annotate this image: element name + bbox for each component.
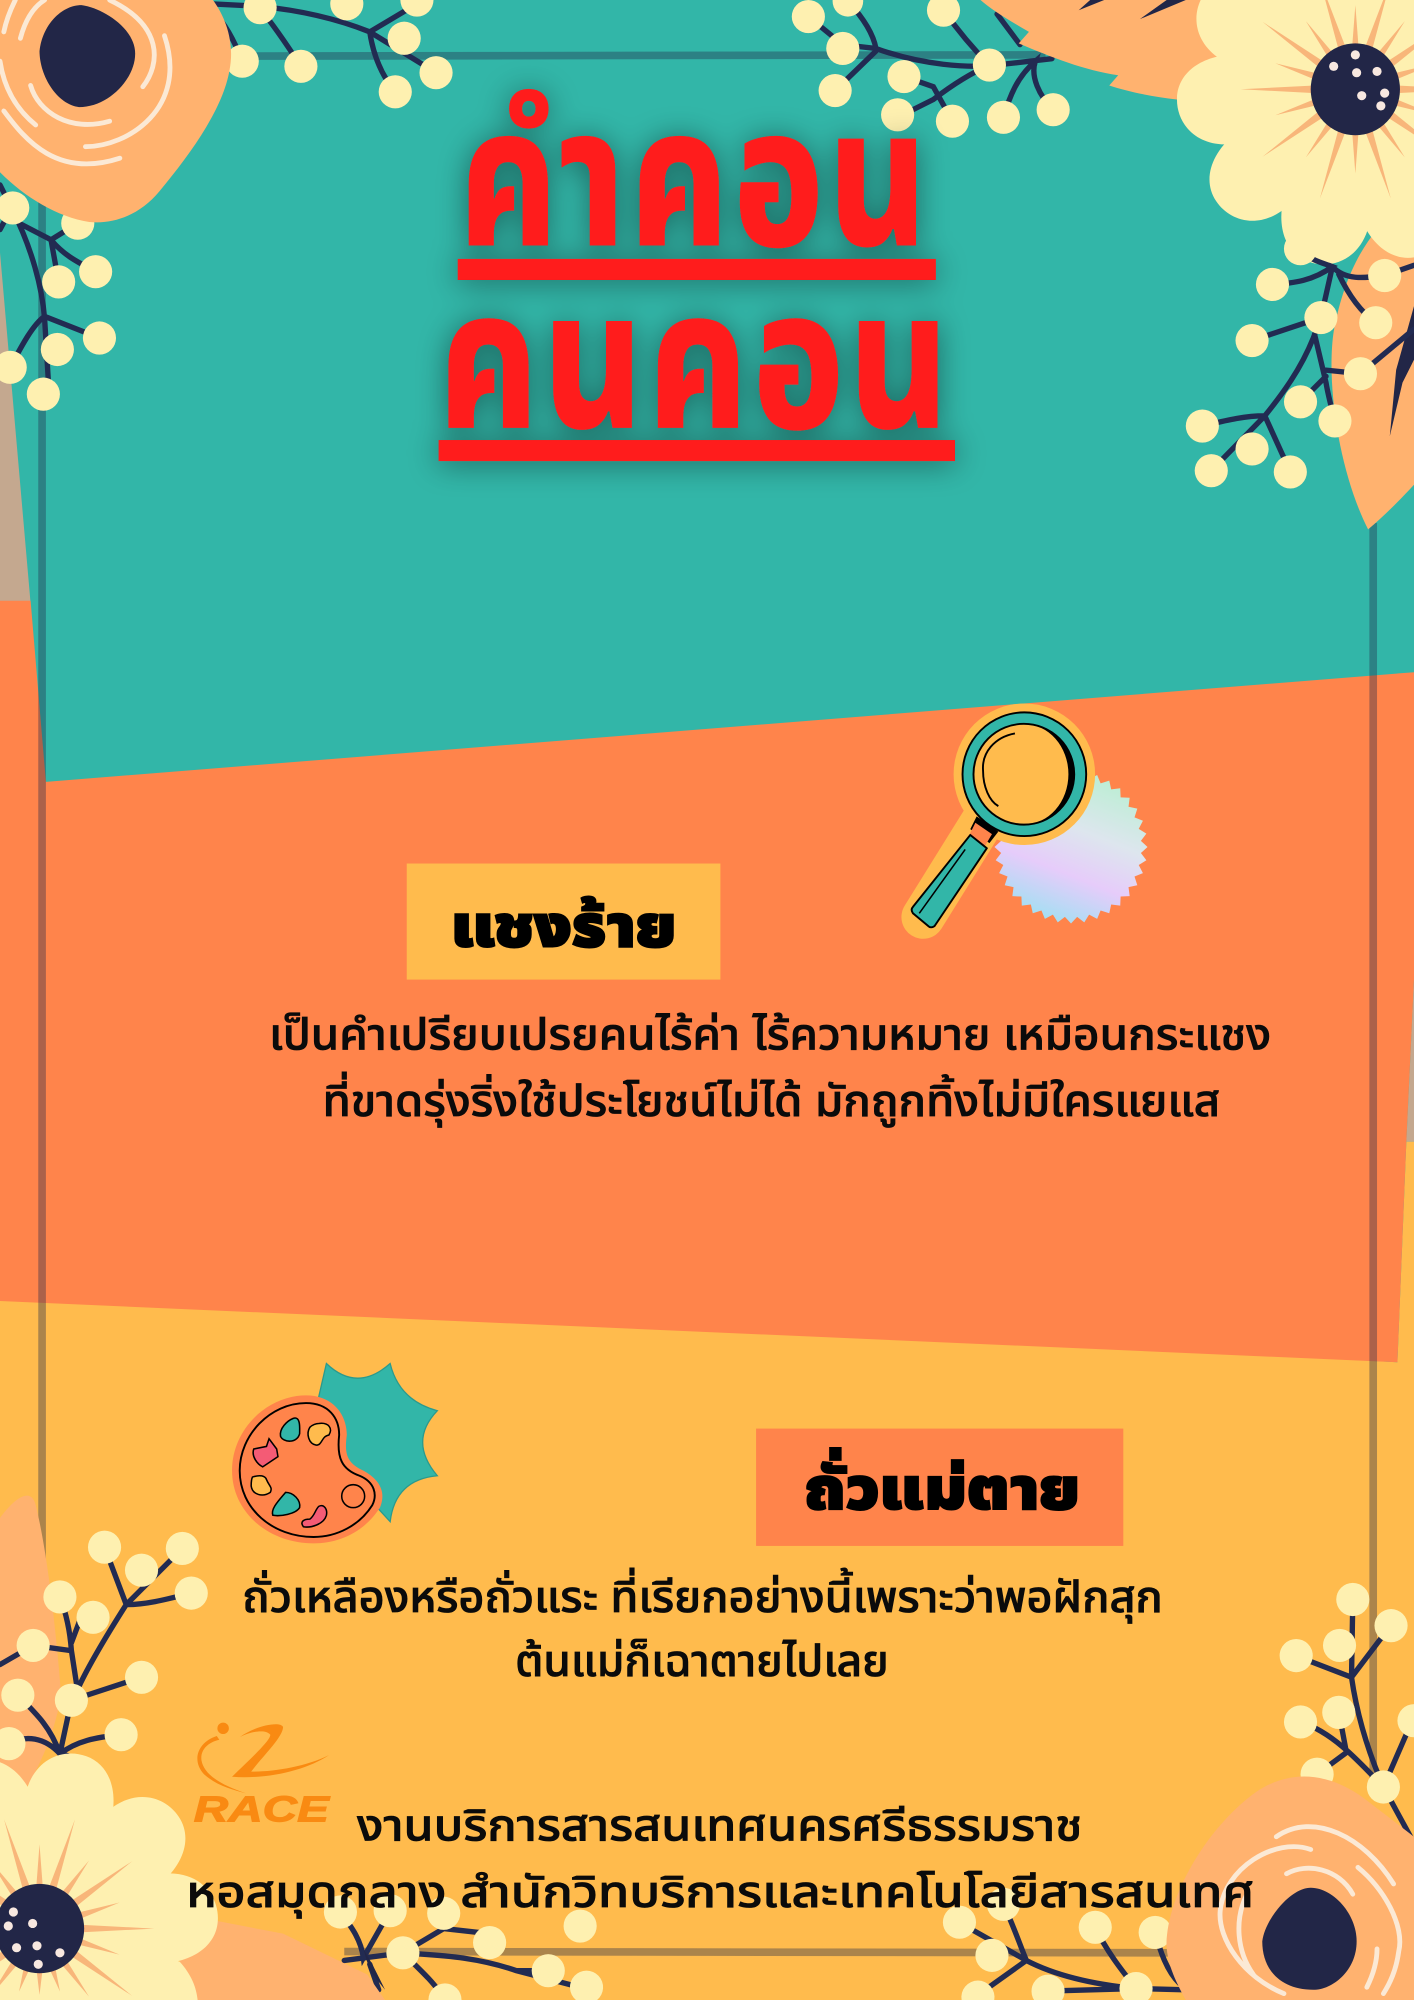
text block: definition of แชงร้าย bbox=[269, 1012, 1271, 1127]
text block: definition of ถั่วแม่ตาย bbox=[242, 1567, 1163, 1686]
text block: definition of ถั่วแม่ตาย: ต้นแม่ก็เฉาตายไปเลย bbox=[515, 1638, 889, 1686]
text block: definition of แชงร้าย: เป็นคำเปรียบเปรยคนไร้ค่า ไร้ความหมาย เหมือนกระแชง bbox=[269, 1012, 1271, 1060]
label: ถั่วแม่ตาย bbox=[756, 1429, 1123, 1546]
bottom-left leaf bbox=[0, 1496, 61, 1824]
text block: organisation credit: หอสมุดกลาง สำนักวิทบริการและเทคโนโลยีสารสนเทศ bbox=[186, 1869, 1255, 1918]
magnifier bbox=[912, 703, 1095, 927]
right peach leaf bbox=[1331, 198, 1414, 529]
palette bbox=[232, 1395, 382, 1543]
title underline 1 bbox=[458, 259, 936, 280]
right berry branch bbox=[1186, 232, 1414, 489]
left berry branch bbox=[0, 185, 116, 411]
text block: organisation credit: งานบริการสารสนเทศนครศรีธรรมราช bbox=[357, 1803, 1082, 1851]
title underline 2 bbox=[439, 440, 955, 461]
top-left berry branch bbox=[210, 0, 453, 108]
label: แชงร้าย bbox=[407, 864, 720, 980]
bottom-right peach rose bbox=[1167, 1777, 1414, 2000]
title line 1: คำคอน bbox=[459, 70, 932, 288]
label: ถั่วแม่ตาย: ถั่วแม่ตาย bbox=[805, 1448, 1080, 1522]
bottom berry branch left bbox=[324, 1894, 603, 2000]
logo: RACE bbox=[194, 1723, 331, 1829]
bottom peach leaf bbox=[180, 1921, 385, 2000]
icon: magnifying glass with holographic seal bbox=[912, 703, 1148, 927]
bottom-left cream flower bbox=[0, 1744, 221, 2000]
logo: RACE: RACE bbox=[194, 1789, 331, 1829]
text block: definition of แชงร้าย: ที่ขาดรุ่งริ่งใช้ประโยชน์ไม่ได้ มักถูกทิ้งไม่มีใครแยแส bbox=[323, 1071, 1220, 1127]
holographic seal bbox=[995, 770, 1148, 923]
icon: paint palette with teal burst bbox=[232, 1364, 437, 1543]
bottom-left berry branch bbox=[0, 1531, 208, 1765]
teal burst bbox=[319, 1364, 437, 1522]
text block: definition of ถั่วแม่ตาย: ถั่วเหลืองหรือถั่วแระ ที่เรียกอย่างนี้เพราะว่าพอฝักสุก bbox=[242, 1567, 1163, 1623]
title line 2: คนคอน bbox=[439, 252, 954, 470]
bottom-right berry branch bbox=[1280, 1583, 1414, 1843]
title bbox=[439, 70, 955, 470]
bottom berry branch right bbox=[943, 1888, 1186, 2000]
top-left peach rose bbox=[0, 0, 231, 222]
top-right peach leaf bbox=[980, 0, 1288, 105]
label: แชงร้าย: แชงร้าย bbox=[451, 894, 676, 959]
top-centre berry branch bbox=[792, 0, 1070, 138]
text block: organisation credit bbox=[186, 1803, 1255, 1918]
top-right cream flower bbox=[1174, 0, 1414, 274]
